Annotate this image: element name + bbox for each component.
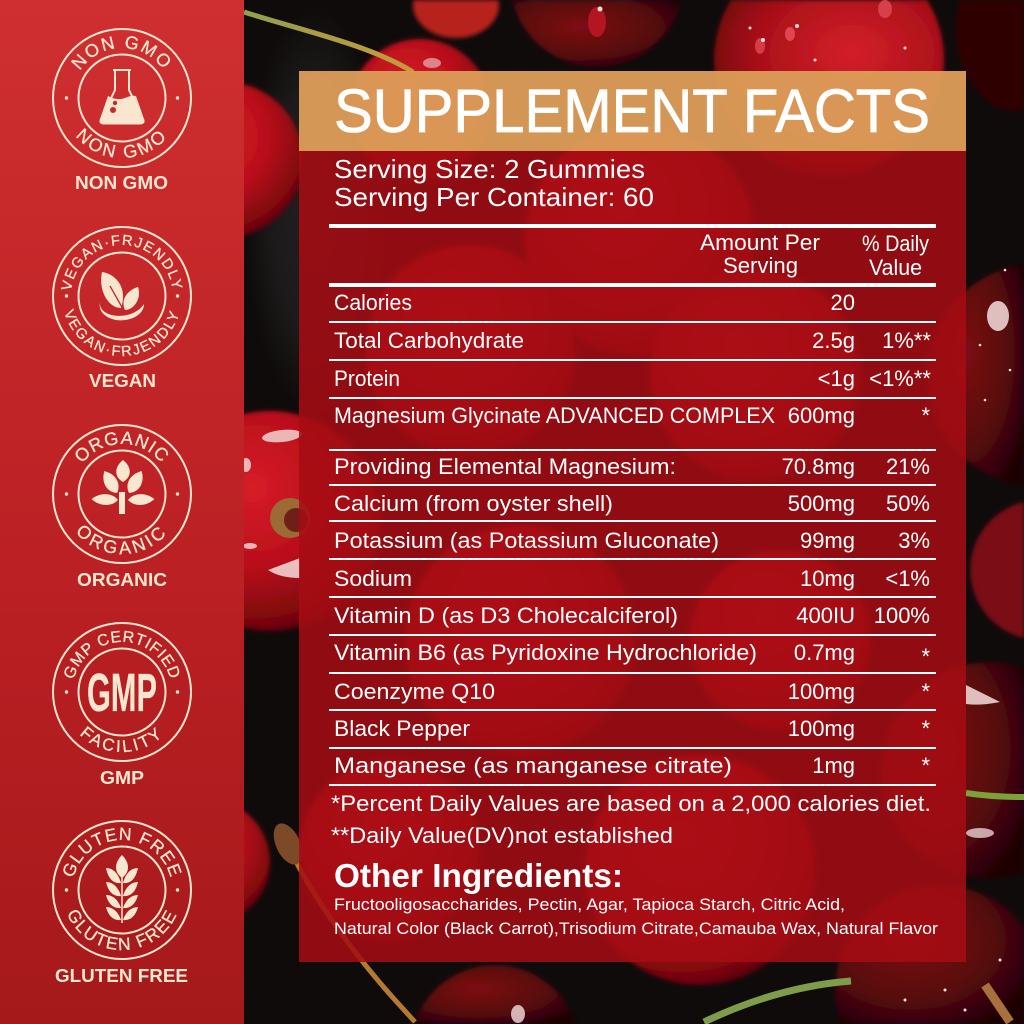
badge: gmp: GMP — [87, 663, 157, 723]
table: nutrition rows: Providing Elemental Magnesium: — [334, 454, 676, 479]
badge: gluten free: GLUTEN FREE — [63, 828, 182, 877]
badge: organic — [52, 424, 192, 564]
badge: non gmo — [52, 28, 192, 168]
table: nutrition rows: 400IU — [796, 603, 855, 628]
text block: serving info: Serving Size: 2 Gummies — [334, 154, 645, 184]
caption: gluten free: GLUTEN FREE — [55, 966, 188, 986]
table: nutrition rows: <1% — [885, 566, 930, 591]
droplets and highlights — [241, 0, 1011, 1023]
badge: organic: ORGANIC — [78, 526, 164, 554]
table: nutrition rows: <1%** — [869, 366, 931, 391]
table: nutrition rows: Calories — [334, 290, 412, 315]
text block: serving info: Serving Per Container: 60 — [334, 182, 654, 212]
table: nutrition rows: 10mg — [800, 566, 855, 591]
table: nutrition rows: * — [921, 644, 930, 669]
table: nutrition rows: 1mg — [812, 753, 855, 778]
table: nutrition rows: Vitamin B6 (as Pyridoxine Hydrochloride) — [334, 640, 757, 665]
table: nutrition rows: Vitamin D (as D3 Cholecalciferol) — [334, 603, 678, 628]
badge: non gmo: NON GMO — [71, 36, 170, 70]
table: nutrition rows: 100mg — [788, 679, 855, 704]
table: nutrition rows: 100mg — [788, 716, 855, 741]
badge: gmp: GMP CERTIFIED — [64, 630, 180, 678]
footnotes: **Daily Value(DV)not established — [331, 823, 673, 848]
table: nutrition rows: * — [921, 716, 930, 741]
table: nutrition rows: 500mg — [788, 491, 855, 516]
table: nutrition rows: Magnesium Glycinate ADVANCED COMPLEX — [334, 403, 775, 428]
table: nutrition rows: 20 — [831, 290, 855, 315]
badge: organic: ORGANIC — [76, 432, 168, 461]
text block: ingredient list: Fructooligosaccharides, Pectin, Agar, Tapioca Starch, Citric Acid, — [334, 896, 845, 914]
table: nutrition rows: * — [921, 753, 930, 778]
panel: supplement facts backing — [299, 71, 966, 962]
table: nutrition rows: Protein — [334, 366, 400, 391]
table: nutrition rows: * — [921, 403, 930, 428]
table: nutrition rows: Total Carbohydrate — [334, 328, 524, 353]
caption: vegan: VEGAN — [89, 371, 156, 391]
table: nutrition rows: Amount Per — [700, 230, 820, 255]
badge: gluten free — [52, 820, 192, 960]
badge: vegan: VEGAN·FRJENDLY — [65, 308, 178, 356]
caption: organic: ORGANIC — [77, 570, 167, 590]
cherry stem dimple — [270, 498, 310, 538]
table: nutrition rows: 600mg — [788, 403, 855, 428]
table: nutrition rows: * — [921, 679, 930, 704]
table: nutrition rows: Serving — [723, 253, 798, 278]
table: nutrition rows: Coenzyme Q10 — [334, 679, 495, 704]
footnotes — [331, 791, 931, 848]
table: nutrition rows: % Daily — [862, 231, 929, 256]
title: SUPPLEMENT FACTS — [334, 77, 930, 145]
footnotes: *Percent Daily Values are based on a 2,000 calories diet. — [331, 791, 931, 816]
text block: serving info — [334, 154, 654, 212]
panel: certification sidebar — [0, 0, 244, 1024]
badge: vegan — [52, 226, 192, 366]
cherry stems — [244, 12, 1024, 1022]
text block: ingredient list — [334, 896, 939, 938]
badge: non gmo: NON GMO — [76, 128, 164, 158]
table: nutrition rows — [329, 224, 936, 786]
table: nutrition rows: Black Pepper — [334, 716, 470, 741]
table: nutrition rows: Calcium (from oyster shell) — [334, 491, 613, 516]
badge: vegan: VEGAN·FRJENDLY — [60, 234, 183, 290]
table: nutrition rows: 70.8mg — [782, 454, 855, 479]
table: nutrition rows: 1%** — [882, 328, 931, 353]
table: nutrition rows: <1g — [818, 366, 855, 391]
table: nutrition rows: 2.5g — [812, 328, 855, 353]
table: nutrition rows: 3% — [898, 528, 930, 553]
table: nutrition rows: Sodium — [334, 566, 412, 591]
caption: non gmo: NON GMO — [75, 173, 168, 193]
table: nutrition rows: 100% — [874, 603, 930, 628]
text block: ingredient list: Natural Color (Black Carrot),Trisodium Citrate,Camauba Wax, Natural Flavor — [334, 920, 939, 938]
table: nutrition rows: 50% — [886, 491, 930, 516]
badge: gmp: FACILITY — [80, 726, 160, 752]
heading: other ingredients: Other Ingredients: — [334, 857, 623, 894]
table: nutrition rows: 0.7mg — [794, 640, 855, 665]
badge: gmp — [52, 622, 192, 762]
badge: gluten free: GLUTEN FREE — [68, 910, 177, 950]
table: nutrition rows: 21% — [886, 454, 930, 479]
table: nutrition rows: Potassium (as Potassium Gluconate) — [334, 528, 719, 553]
caption: gmp: GMP — [100, 768, 144, 788]
table: nutrition rows: Value — [869, 255, 922, 280]
table: nutrition rows: 99mg — [800, 528, 855, 553]
table: nutrition rows: Manganese (as manganese citrate) — [334, 753, 732, 778]
